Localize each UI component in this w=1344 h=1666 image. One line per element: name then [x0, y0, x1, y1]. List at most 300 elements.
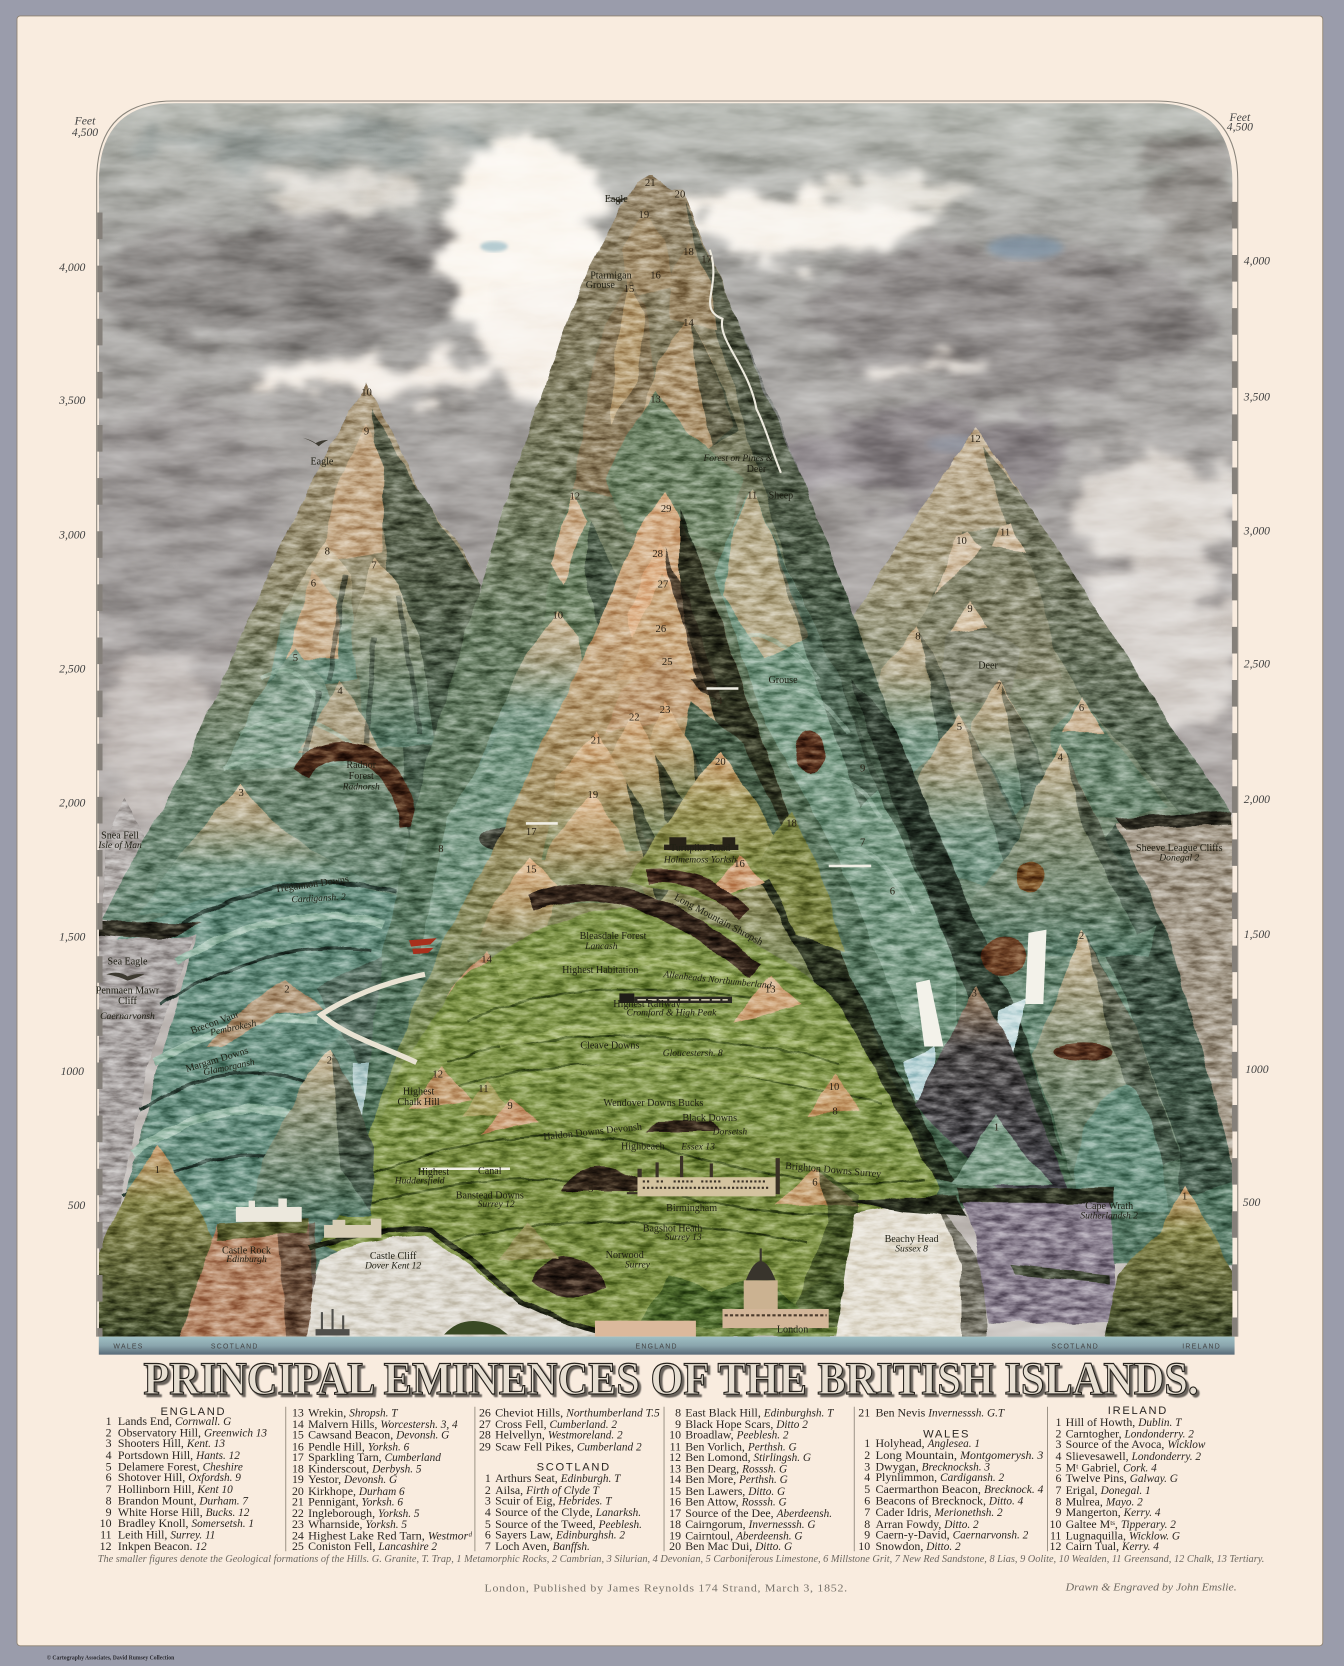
column: Scotland 8-20: Black Hope Scars, Ditto 2 — [685, 1417, 808, 1431]
column: Scotland 8-20: 14 — [669, 1472, 681, 1486]
peak numbers: central massif: 5 — [588, 1184, 593, 1195]
hill: peak 1 teal — [951, 1116, 1052, 1185]
ridge: peak 15 — [574, 282, 653, 499]
column: Scotland 21 and Wales: Arran Fowdy, Ditto. 2 — [875, 1517, 979, 1531]
hill: Wales 1 — [98, 1145, 218, 1339]
hill: Norwood peak — [499, 1222, 558, 1259]
ledge: Sheeve cliff top — [1116, 811, 1232, 829]
ridge: peak 28 — [627, 542, 691, 659]
ridge: peak 5 left — [223, 648, 351, 770]
column: Scotland 21 and Wales: Caern-y-David, Caernarvonsh. 2 — [875, 1527, 1029, 1541]
label: Scotland: SCOTLAND — [211, 1343, 259, 1350]
column: Scotland 21 and Wales: Caermarthon Beacon, Brecknock. 4 — [875, 1482, 1044, 1496]
column: England 26-29 and Scotland 1-7: 6 — [485, 1527, 491, 1541]
map labels: central: Ptarmigan — [590, 270, 632, 281]
peak numbers: central massif: 24 — [712, 696, 723, 707]
column: Ireland: IRELAND — [1108, 1405, 1168, 1417]
peak numbers: left massif: 5 — [293, 653, 298, 664]
icon: fire glow — [409, 938, 437, 954]
column: England 1-12 — [100, 1406, 267, 1553]
hill: peak 12 low — [409, 1068, 473, 1110]
column: England 13-25: 22 — [292, 1506, 304, 1520]
ridge: peak 12 — [521, 491, 637, 733]
column: England 13-25: 21 — [292, 1495, 304, 1509]
label: Ireland: IRELAND — [1182, 1343, 1221, 1350]
forest: patch — [795, 731, 824, 774]
icon: sea eagle — [106, 973, 144, 981]
column: England 13-25: 13 — [292, 1405, 304, 1419]
column: Ireland: 10 — [1050, 1517, 1061, 1531]
forest: Long Mountain band — [648, 876, 744, 914]
scale labels: right — [1227, 111, 1270, 1209]
column: England 13-25: Wrekin, Shropsh. T — [308, 1405, 398, 1419]
column: England 26-29 and Scotland 1-7: 27 — [479, 1417, 491, 1431]
peak numbers: central massif — [432, 178, 895, 1195]
icon: river left — [321, 974, 425, 1062]
peak numbers: central massif: 9 — [860, 763, 865, 774]
peak numbers: central massif: 12 — [569, 491, 580, 502]
peak numbers: central massif: 16 — [734, 859, 745, 870]
map labels: left: Huddersfield — [394, 1176, 445, 1187]
column: Scotland 8-20: 20 — [669, 1539, 681, 1553]
peak numbers: central massif: 21 — [591, 736, 601, 747]
panel: mountain illustration — [93, 175, 1238, 1341]
column: Scotland 21 and Wales: 2 — [864, 1448, 870, 1462]
scale labels: right: 2,500 — [1244, 657, 1270, 670]
column: England 1-12: Hollinborn Hill, Kent 10 — [118, 1482, 233, 1496]
ridge: peak 19 — [531, 792, 648, 903]
column: England 26-29 and Scotland 1-7: 26 — [479, 1405, 491, 1419]
column: Scotland 8-20: 15 — [669, 1484, 681, 1498]
map labels: central: Norwood — [606, 1250, 644, 1261]
mountain: England main peak — [345, 491, 940, 1337]
column: Ireland: 8 — [1055, 1495, 1061, 1509]
column: Scotland 8-20: Cairntoul, Aberdeensh. G — [685, 1529, 803, 1543]
ridge: peak 14 low — [436, 951, 508, 1052]
column: England 13-25: 19 — [292, 1472, 304, 1486]
column: England 1-12: White Horse Hill, Bucks. 12 — [118, 1505, 250, 1519]
scale labels: right: Feet — [1229, 111, 1251, 124]
icon: mountain stream — [710, 250, 781, 473]
peak numbers: left massif: 4 — [337, 686, 343, 697]
column: Ireland: Mangerton, Kerry. 4 — [1066, 1505, 1161, 1519]
ridge: peak 23 — [648, 701, 707, 808]
map labels: central: Grouse — [768, 675, 798, 686]
map labels: central: Lancash — [584, 941, 618, 952]
cliff: Cape Wrath — [962, 1195, 1118, 1323]
column: England 26-29 and Scotland 1-7 — [479, 1405, 660, 1553]
peak numbers: right massif: 2 — [1079, 931, 1084, 942]
map labels: left — [96, 456, 502, 1272]
column: England 26-29 and Scotland 1-7: Scaw Fell Pikes, Cumberland 2 — [495, 1439, 642, 1453]
column: Ireland: 1 — [1055, 1415, 1061, 1429]
column: England 1-12: 10 — [100, 1516, 112, 1530]
column: England 13-25: Highest Lake Red Tarn, Westmorᵈ — [308, 1529, 472, 1543]
forest: flank patch — [480, 827, 535, 852]
column: Scotland 8-20: Ben Attow, Rosssh. G — [685, 1495, 787, 1509]
cliff: Castle Rock — [178, 1220, 317, 1341]
peak numbers: left massif — [155, 387, 377, 1176]
column: Scotland 21 and Wales: 9 — [864, 1527, 870, 1541]
column: Scotland 8-20: Ben Dearg, Rosssh. G — [685, 1462, 787, 1476]
ridge: peak 9 left — [326, 424, 384, 559]
column: England 13-25: 15 — [292, 1428, 304, 1442]
hill: peak 6 low — [776, 1169, 861, 1206]
icon: ship — [317, 1309, 348, 1334]
column: Ireland: Hill of Howth, Dublin. T — [1066, 1415, 1182, 1429]
column: Ireland: Carntogher, Londonderry. 2 — [1066, 1427, 1194, 1441]
map labels: central: Gloucestersh. 8 — [663, 1048, 723, 1059]
peak numbers: right massif: 8 — [915, 632, 921, 643]
peak numbers: right massif: 10 — [956, 536, 967, 547]
hill: peak 11 low — [462, 1082, 518, 1116]
icon: eagle centre — [606, 197, 628, 203]
map labels: central: Banstead Downs — [456, 1190, 524, 1201]
column: Scotland 8-20: 12 — [669, 1450, 681, 1464]
panel: bottom sea band — [99, 1337, 1235, 1355]
map labels: central: Turnpike Road — [670, 843, 730, 854]
column: England 13-25 — [292, 1405, 472, 1553]
map labels: right: Sheeve League Cliffs — [1136, 843, 1223, 854]
map labels: left: Radnorsh — [342, 781, 380, 792]
peak numbers: central massif: 17 — [526, 827, 537, 838]
column: Scotland 21 and Wales: 7 — [864, 1505, 870, 1519]
peak numbers: central massif: 15 — [624, 284, 634, 295]
peak numbers: central massif: 27 — [658, 580, 668, 591]
peak numbers: right massif: 11 — [1000, 528, 1010, 539]
peak numbers: central massif: 19 — [639, 210, 649, 221]
peak numbers: central massif: 8 — [438, 844, 444, 855]
column: England 13-25: 18 — [292, 1462, 304, 1476]
icon: castle Edinburgh — [236, 1198, 302, 1222]
ridge: teal dome — [1073, 1084, 1169, 1211]
column: Ireland: Lugnaquilla, Wicklow. G — [1066, 1529, 1180, 1543]
column: England 13-25: Kinderscout, Derbysh. 5 — [308, 1462, 422, 1476]
peak numbers: left massif: 2 — [284, 984, 290, 995]
column: Scotland 8-20: Source of the Dee, Aberdeensh. — [685, 1506, 832, 1520]
shadow: inner ridges — [627, 749, 744, 903]
column: Scotland 21 and Wales: 8 — [864, 1517, 870, 1531]
column: England 26-29 and Scotland 1-7: 3 — [485, 1493, 491, 1507]
peak numbers: central massif: 23 — [660, 705, 670, 716]
column: England 1-12: 6 — [106, 1470, 112, 1484]
column: England 1-12: Leith Hill, Surrey. 11 — [118, 1527, 215, 1541]
column: England 13-25: Ingleborough, Yorksh. 5 — [308, 1506, 420, 1520]
column: Ireland: 6 — [1055, 1471, 1061, 1485]
peak numbers: central massif: 15 — [526, 864, 537, 875]
scale labels: right: 500 — [1243, 1196, 1260, 1209]
cliff: Sheeve League — [1105, 816, 1238, 1217]
dividers — [286, 1407, 1048, 1551]
scale labels: right: 4,500 — [1227, 121, 1253, 134]
scale: left feet ruler — [97, 213, 102, 1337]
ridge: peak 21 — [542, 731, 648, 861]
map labels: central: Essex 13 — [680, 1142, 715, 1153]
map labels: central: Wendover Downs Bucks — [603, 1098, 703, 1109]
column: Scotland 21 and Wales: 6 — [864, 1493, 870, 1507]
scale: right feet ruler — [1232, 202, 1237, 1337]
scale labels: left: 4,000 — [59, 261, 86, 274]
column: England 13-25: Coniston Fell, Lancashire 2 — [308, 1539, 437, 1553]
ridge: peak 6 — [1052, 696, 1169, 818]
column: England 1-12: 3 — [106, 1436, 112, 1450]
icon: lakes — [421, 689, 871, 1169]
peak numbers: central massif: 19 — [588, 790, 598, 801]
label: England: ENGLAND — [635, 1343, 678, 1350]
map labels: central: Forest on Pines & — [702, 453, 774, 464]
map labels: central: Birmingham — [666, 1203, 717, 1214]
water: right falls — [903, 1047, 935, 1105]
peak numbers: right massif: 12 — [970, 434, 981, 445]
cliff: Penmaen Mawr — [93, 926, 197, 1270]
column: England 13-25: Pennigant, Yorksh. 6 — [308, 1495, 403, 1509]
scale labels: right: 3,000 — [1243, 524, 1270, 537]
map labels: central: Long Mountain Shropsh — [672, 892, 764, 948]
ridge: peak 11 centre — [714, 489, 956, 1052]
column: Scotland 21 and Wales: Beacons of Brecknock, Ditto. 4 — [875, 1493, 1024, 1507]
column: Scotland 8-20: 10 — [669, 1428, 681, 1442]
scale labels: left: 1000 — [61, 1065, 84, 1078]
column: England 1-12: 7 — [106, 1482, 112, 1496]
peak numbers: central massif: 29 — [661, 504, 671, 515]
map labels: central: Highbeach — [621, 1142, 665, 1153]
ridge: teal flank — [420, 723, 574, 956]
peak numbers: central massif: 25 — [662, 657, 673, 668]
column: Scotland 21 and Wales: 5 — [864, 1482, 870, 1496]
column: England 26-29 and Scotland 1-7: Helvellyn, Westmoreland. 2 — [495, 1428, 623, 1442]
column: Scotland 8-20: Ben Lomond, Stirlingsh. G — [685, 1450, 811, 1464]
column: England 26-29 and Scotland 1-7: Sayers Law, Edinburghsh. 2 — [495, 1527, 625, 1541]
column: England 1-12: Lands End, Cornwall. G — [118, 1414, 231, 1428]
peak numbers: left massif: 6 — [311, 579, 316, 590]
column: England 26-29 and Scotland 1-7: Cross Fell, Cumberland. 2 — [495, 1417, 617, 1431]
map labels: central: Grouse — [586, 280, 615, 291]
column: Ireland: 9 — [1055, 1505, 1061, 1519]
cliff: Beachy Head — [834, 1198, 988, 1341]
column: Ireland: 12 — [1050, 1539, 1061, 1553]
peak numbers: right massif: 4 — [1058, 753, 1064, 764]
column: Scotland 8-20: 16 — [669, 1495, 681, 1509]
icon: London dome and buildings — [595, 1248, 829, 1337]
column: Scotland 8-20: Ben Mac Dui, Ditto. G — [685, 1539, 792, 1553]
column: England 1-12: Delamere Forest, Cheshire — [118, 1459, 243, 1473]
column: England 26-29 and Scotland 1-7: SCOTLAND — [537, 1461, 611, 1473]
column: England 26-29 and Scotland 1-7: 7 — [485, 1539, 491, 1553]
foreground: London hill — [637, 1275, 818, 1328]
column: Scotland 8-20: 13 — [669, 1462, 681, 1476]
scale labels: left: 2,000 — [59, 796, 86, 809]
map labels: right: Cape Wrath — [1085, 1201, 1133, 1212]
forest: Radnor — [302, 751, 409, 827]
peak numbers: left massif: 9 — [364, 427, 369, 438]
map labels: left: Castle Cliff — [370, 1251, 417, 1262]
peak numbers: central massif: 12 — [432, 1069, 443, 1080]
scale labels: right: 1,500 — [1244, 928, 1270, 941]
hill: peak 13 low — [733, 975, 802, 1022]
ridge: peak 2 — [1032, 930, 1180, 1198]
column: Ireland: 4 — [1055, 1449, 1061, 1463]
map labels: central: Black Downs — [682, 1113, 737, 1124]
column: Scotland 8-20: Ben Vorlich, Perthsh. G — [685, 1439, 797, 1453]
column: Scotland 21 and Wales: Long Mountain, Montgomerysh. 3 — [875, 1448, 1044, 1462]
column: Ireland: Source of the Avoca, Wicklow — [1066, 1437, 1206, 1451]
peak numbers: left massif: 1 — [155, 1165, 160, 1176]
column: England 1-12: ENGLAND — [160, 1406, 226, 1418]
column: England 26-29 and Scotland 1-7: 4 — [485, 1505, 491, 1519]
ridge: peak 25 — [606, 650, 712, 733]
column: England 26-29 and Scotland 1-7: Source of the Tweed, Peeblesh. — [495, 1517, 642, 1531]
column: Ireland: 3 — [1055, 1437, 1061, 1451]
scale labels: left: Feet — [74, 114, 96, 127]
icon: Dover castle — [324, 1219, 381, 1238]
column: Scotland 8-20: 18 — [669, 1517, 681, 1531]
ridge: peak 18 — [669, 242, 717, 329]
column: Scotland 21 and Wales: Holyhead, Anglesea. 1 — [875, 1436, 980, 1450]
mountain: central massif — [351, 175, 1073, 1211]
column: England 13-25: 20 — [292, 1484, 304, 1498]
map labels: central: Haldon Downs Devonsh — [543, 1122, 642, 1143]
map labels: right: Sutherlandsh 2 — [1080, 1211, 1138, 1222]
peak numbers: central massif: 20 — [675, 190, 685, 201]
map labels: left: Margam Downs — [184, 1045, 250, 1075]
cliff: Castle Cliff Dover — [306, 1236, 627, 1341]
column: England 1-12: Observatory Hill, Greenwich 13 — [118, 1425, 267, 1439]
column: Scotland 21 and Wales: Ben Nevis Invernesssh. G.T — [875, 1405, 1005, 1419]
column: Scotland 8-20: 11 — [670, 1439, 681, 1453]
column: England 26-29 and Scotland 1-7: Source of the Clyde, Lanarksh. — [495, 1505, 641, 1519]
column: England 13-25: Malvern Hills, Worcestersh. 3, 4 — [308, 1417, 458, 1431]
map labels: left: Isle of Man — [97, 840, 142, 851]
column: England 13-25: Wharnside, Yorksh. 5 — [308, 1517, 407, 1531]
scale labels: left: 4,500 — [72, 126, 98, 139]
peak numbers: central massif: 6 — [890, 887, 895, 898]
column: England 13-25: Pendle Hill, Yorksh. 6 — [308, 1439, 410, 1453]
map labels: right: Donegal 2 — [1158, 853, 1200, 864]
column: England 13-25: 17 — [292, 1450, 304, 1464]
footnote: geological key: The smaller figures denote the Geological formations of the Hills. G. Granite, T. Trap, 1 Metamorphic Rocks, 2 Cambrian, 3 Silurian, 4 Devonian, 5 Carboniferous Limestone, 6 Millstone Grit, 7 New Red Sandstone, 8 Lias, 9 Oolite, 10 Wealden, 11 Greensand, 12 Chalk, 13 Tertiary. — [98, 1554, 1264, 1565]
column: Ireland — [1050, 1405, 1206, 1553]
ridge: peak 7 — [970, 680, 1043, 815]
hill: peak 3 black — [914, 986, 1068, 1190]
peak numbers: central massif: 22 — [629, 712, 640, 723]
column: Scotland 21 and Wales: 21 — [858, 1405, 870, 1419]
map labels: central: Cleave Downs — [580, 1041, 639, 1052]
column: Scotland 21 and Wales: WALES — [923, 1429, 970, 1441]
valley: river and water — [316, 935, 425, 1068]
peak numbers: right massif: 9 — [967, 604, 973, 615]
column: England 1-12: 4 — [106, 1448, 112, 1462]
peak numbers: left massif: 7 — [371, 560, 377, 571]
map labels: central — [456, 194, 882, 1335]
column: England 13-25: Sparkling Tarn, Cumberland — [308, 1450, 441, 1464]
hill: Wales 2 — [246, 1050, 374, 1217]
map labels: left: Snea Fell — [101, 830, 139, 841]
title: PRINCIPAL EMINENCES OF THE BRITISH ISLANDS. — [143, 1353, 1198, 1405]
map labels: central: Bleasdale Forest — [580, 931, 647, 942]
scale labels: right: 1000 — [1245, 1063, 1269, 1076]
map labels: central: London — [777, 1324, 808, 1335]
map labels: left: Chalk Hill — [397, 1097, 440, 1108]
map labels: central: Bagshot Heath — [643, 1223, 702, 1234]
scale labels: left: 500 — [68, 1199, 85, 1212]
imprint: engraver: Drawn & Engraved by John Emslie. — [1065, 1583, 1237, 1594]
column: Scotland 8-20: Broadlaw, Peeblesh. 2 — [685, 1428, 789, 1442]
column: England 13-25: Cawsand Beacon, Devonsh. G — [308, 1428, 449, 1442]
peak numbers: central massif: 21 — [645, 178, 656, 189]
peak numbers: central massif: 18 — [683, 247, 694, 258]
imprint: publisher: London, Published by James Reynolds 174 Strand, March 3, 1852. — [484, 1584, 848, 1595]
peak numbers: central massif: 16 — [650, 270, 661, 281]
icon: coach — [664, 837, 738, 850]
ridge: peak 14 — [637, 317, 733, 478]
scale labels: left: 2,500 — [59, 663, 86, 676]
scale labels: left: 1,500 — [59, 930, 86, 943]
peak numbers: left massif: 3 — [239, 788, 244, 799]
peak numbers: central massif: 13 — [765, 984, 776, 995]
column: Ireland: Cairn Tual, Kerry. 4 — [1066, 1539, 1159, 1553]
column: England 26-29 and Scotland 1-7: 1 — [485, 1471, 491, 1485]
ridge: peak 18 — [760, 811, 845, 951]
column: Ireland: Erigal, Donegal. 1 — [1066, 1483, 1151, 1497]
map labels: left: Dover Kent 12 — [364, 1261, 421, 1272]
icon: Birmingham buildings — [637, 1177, 776, 1196]
column: England 1-12: Shotover Hill, Oxfordsh. 9 — [118, 1470, 241, 1484]
panel: index of heights — [100, 1405, 1206, 1553]
map labels: right: Deer — [978, 660, 999, 671]
column: England 1-12: Shooters Hill, Kent. 13 — [118, 1436, 225, 1450]
column: England 13-25: Kirkhope, Durham 6 — [308, 1484, 405, 1498]
shadow: right lower — [786, 1169, 861, 1328]
column: England 26-29 and Scotland 1-7: Scuir of Eig, Hebrides. T — [495, 1493, 612, 1507]
icon: waterfall right — [1025, 930, 1047, 1004]
map labels: central: Highest Railway — [613, 999, 681, 1010]
credit: copyright line: © Cartography Associates, David Rumsey Collection — [47, 1655, 175, 1662]
map labels: central: Surrey 12 — [478, 1199, 515, 1210]
map labels: left: Caernarvonsh — [100, 1011, 155, 1022]
map labels: left: Sea Eagle — [107, 957, 148, 968]
map labels: left: Eagle — [310, 456, 334, 467]
map labels: left: Cardigansh. 2 — [291, 892, 346, 905]
mountain: right massif — [850, 427, 1238, 1264]
mountain: left massif — [102, 383, 480, 1275]
map labels: left: Castle Rock — [222, 1246, 272, 1257]
shadow: England right slope — [680, 510, 956, 1185]
peak numbers: right massif: 6 — [1079, 703, 1084, 714]
peak numbers: left massif: 10 — [361, 387, 372, 398]
ridge: peak 4 — [962, 744, 1158, 956]
peak numbers: central massif: 14 — [683, 318, 694, 329]
peak numbers: central massif: 11 — [478, 1084, 489, 1095]
ridge: peak 8 — [878, 626, 948, 772]
scale labels: left: 3,000 — [58, 529, 86, 542]
column: Ireland: Mᵗ Gabriel, Cork. 4 — [1066, 1461, 1157, 1475]
hill: Ireland 1 — [1105, 1186, 1238, 1341]
column: England 1-12: 8 — [106, 1493, 112, 1507]
peak numbers: central massif: 9 — [507, 1101, 513, 1112]
icon: railway train — [619, 993, 732, 1003]
map labels: left: Radnor — [346, 760, 377, 771]
ridge: lower dark flank — [680, 701, 807, 882]
column: England 1-12: Portsdown Hill, Hants. 12 — [118, 1448, 240, 1462]
forest: lower groves — [561, 1121, 720, 1191]
peak numbers: central massif: 17 — [701, 254, 712, 265]
icon: eagle left — [303, 438, 328, 446]
peak numbers: central massif: 18 — [786, 819, 797, 830]
map labels: central: Deer — [747, 464, 767, 475]
scale labels: right: 2,000 — [1244, 793, 1270, 806]
column: England 1-12: 1 — [106, 1414, 112, 1428]
map labels: right — [885, 660, 1223, 1255]
